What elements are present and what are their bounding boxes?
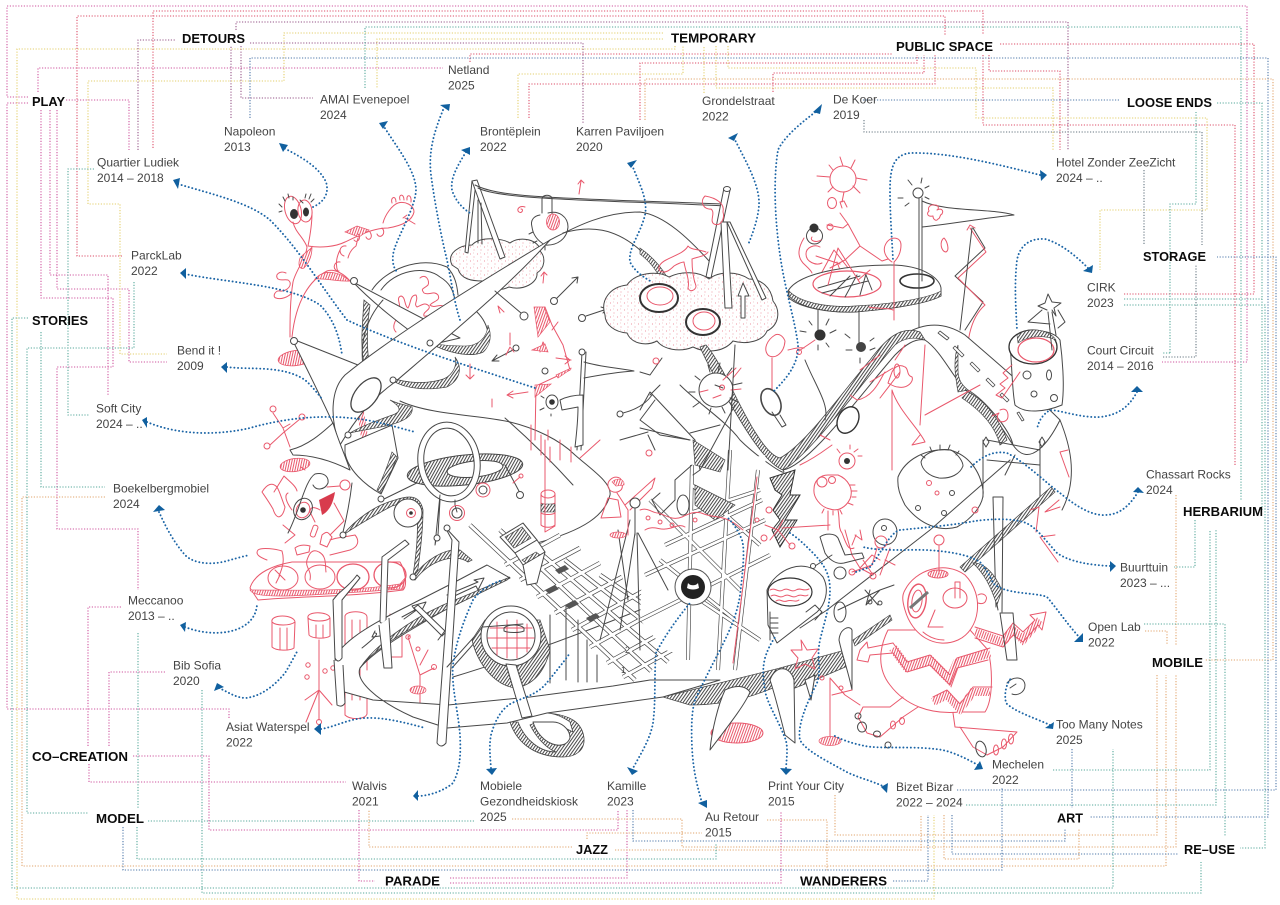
label: Mobiele Gezondheidskiosk: Gezondheidskiosk bbox=[480, 794, 579, 808]
label: Brontëplein: 2022 bbox=[480, 140, 507, 154]
label: Grondelstraat: 2022 bbox=[702, 110, 729, 124]
label: Boekelbergmobiel: Boekelbergmobiel bbox=[113, 482, 209, 496]
red figure with eyes, top left bbox=[264, 194, 415, 474]
label: Napoleon: Napoleon bbox=[224, 124, 275, 138]
heading: parade: PARADE bbox=[385, 874, 440, 888]
label: Bizet Bizar: 2022 – 2024 bbox=[896, 796, 963, 810]
heading: jazz: JAZZ bbox=[576, 842, 608, 857]
heading: stories: STORIES bbox=[32, 313, 88, 328]
label: Chassart Rocks: 2024 bbox=[1146, 483, 1173, 497]
label: CIRK: 2023 bbox=[1087, 296, 1114, 310]
label: Court Circuit: Court Circuit bbox=[1087, 344, 1154, 358]
label: Meccanoo: 2013 – .. bbox=[128, 609, 175, 623]
label: Mobiele Gezondheidskiosk: 2025 bbox=[480, 810, 507, 824]
project labels bbox=[96, 63, 1231, 840]
right mesh tower bbox=[640, 385, 800, 670]
cloud with tripod, left bbox=[451, 180, 725, 289]
rock with fence and road, right bbox=[800, 420, 1071, 628]
central illustration bbox=[250, 157, 1071, 758]
label: Grondelstraat: Grondelstraat bbox=[702, 94, 775, 108]
label: Too Many Notes: Too Many Notes bbox=[1056, 718, 1143, 732]
heading: re-use: RE–USE bbox=[1184, 842, 1235, 857]
label: ParckLab: 2022 bbox=[131, 264, 158, 278]
left red creature and platform bbox=[250, 467, 436, 724]
label: Bib Sofia: Bib Sofia bbox=[173, 658, 221, 672]
blade shapes, left bbox=[290, 212, 710, 543]
centre lattice deck: 2 bbox=[625, 645, 630, 655]
red seated figure bbox=[755, 475, 897, 622]
spiral tail bbox=[510, 713, 584, 757]
big cloud with tripod, top centre bbox=[604, 186, 778, 351]
label: AMAI Evenepoel: 2024 bbox=[320, 108, 347, 122]
label: Napoleon: 2013 bbox=[224, 140, 251, 154]
label: Asiat Waterspel: Asiat Waterspel bbox=[226, 720, 310, 734]
label: Mechelen: Mechelen bbox=[992, 758, 1044, 772]
label: De Koer: 2019 bbox=[833, 108, 860, 122]
label: Hotel Zonder ZeeZicht: Hotel Zonder ZeeZicht bbox=[1056, 156, 1176, 170]
heading: detours: DETOURS bbox=[182, 31, 245, 46]
label: Netland: Netland bbox=[448, 63, 489, 77]
blue dotted arrows bbox=[142, 104, 1144, 808]
heading: art: ART bbox=[1057, 810, 1083, 826]
heading: temporary: TEMPORARY bbox=[671, 30, 756, 46]
label: Karren Paviljoen: 2020 bbox=[576, 140, 603, 154]
label: Netland: 2025 bbox=[448, 78, 475, 92]
heading: mobile: MOBILE bbox=[1152, 655, 1203, 670]
label: Mechelen: 2022 bbox=[992, 773, 1019, 787]
label: Au Retour: 2015 bbox=[705, 826, 732, 840]
label: Buurttuin: Buurttuin bbox=[1120, 560, 1168, 574]
label: Quartier Ludiek: Quartier Ludiek bbox=[97, 156, 180, 170]
label: Bend it!: Bend it ! bbox=[177, 344, 221, 358]
floating disc with red figure and flag bbox=[766, 157, 1014, 410]
heading: co-creation: CO–CREATION bbox=[32, 749, 128, 764]
heading: storage: STORAGE bbox=[1143, 249, 1206, 264]
red plant and barrel, centre bbox=[541, 440, 668, 650]
label: Buurttuin: 2023 – ... bbox=[1120, 576, 1170, 590]
label: Open Lab: 2022 bbox=[1088, 636, 1115, 650]
label: ParckLab: ParckLab bbox=[131, 248, 182, 262]
label: Soft City: 2024 – .. bbox=[96, 417, 143, 431]
ribbons and rings, left centre bbox=[340, 421, 524, 580]
centre lattice deck: 1 bbox=[621, 665, 626, 675]
roller coaster road bbox=[680, 325, 1060, 472]
label: Print Your City: Print Your City bbox=[768, 779, 844, 793]
label: Chassart Rocks: Chassart Rocks bbox=[1146, 468, 1231, 482]
label: Au Retour: Au Retour bbox=[705, 810, 759, 824]
label: Quartier Ludiek: 2014 – 2018 bbox=[97, 171, 164, 185]
heading: model: MODEL bbox=[96, 811, 144, 826]
red monster, bottom right bbox=[855, 535, 1046, 758]
big road loop with lampposts bbox=[333, 525, 720, 746]
label: Court Circuit: 2014 – 2016 bbox=[1087, 359, 1154, 373]
knobs, small arrows and flag, centre top bbox=[466, 277, 652, 462]
label: Kamille: 2023 bbox=[607, 794, 634, 808]
label: Open Lab: Open Lab bbox=[1088, 620, 1141, 634]
heading: play: PLAY bbox=[32, 94, 65, 109]
label: Asiat Waterspel: 2022 bbox=[226, 736, 253, 750]
label: Boekelbergmobiel: 2024 bbox=[113, 497, 140, 511]
centre lattice deck bbox=[470, 520, 705, 683]
label: Bizet Bizar: Bizet Bizar bbox=[896, 780, 953, 794]
label: Print Your City: 2015 bbox=[768, 794, 795, 808]
can with star, top right bbox=[996, 294, 1065, 411]
label: Bib Sofia: 2020 bbox=[173, 674, 200, 688]
label: Too Many Notes: 2025 bbox=[1056, 733, 1083, 747]
label: Karren Paviljoen: Karren Paviljoen bbox=[576, 124, 664, 138]
bucket with waves and eye bbox=[767, 566, 826, 643]
heading: herbarium: HERBARIUM bbox=[1183, 504, 1263, 519]
label: Brontëplein: Brontëplein bbox=[480, 124, 541, 138]
label: CIRK: CIRK bbox=[1087, 280, 1116, 294]
label: Mobiele Gezondheidskiosk: Mobiele bbox=[480, 779, 522, 793]
label: Walvis: Walvis bbox=[352, 779, 387, 793]
label: Hotel Zonder ZeeZicht: 2024 – .. bbox=[1056, 171, 1103, 185]
red ovals and spikes, bottom bbox=[663, 615, 892, 750]
label: Soft City: Soft City bbox=[96, 402, 141, 416]
spiky ball and post, centre bbox=[620, 345, 786, 475]
label: Meccanoo: Meccanoo bbox=[128, 594, 184, 608]
label: Bend it!: 2009 bbox=[177, 359, 204, 373]
label: Kamille: Kamille bbox=[607, 779, 647, 793]
label: AMAI Evenepoel: AMAI Evenepoel bbox=[320, 92, 409, 106]
red coral and rope bbox=[353, 276, 446, 470]
heading: public space: PUBLIC SPACE bbox=[896, 39, 993, 54]
label: De Koer: De Koer bbox=[833, 92, 877, 106]
label: Walvis: 2021 bbox=[352, 794, 379, 808]
heading: wanderers: WANDERERS bbox=[800, 874, 887, 888]
magnifier and barrel bbox=[472, 606, 550, 718]
heading: loose ends: LOOSE ENDS bbox=[1127, 95, 1212, 110]
